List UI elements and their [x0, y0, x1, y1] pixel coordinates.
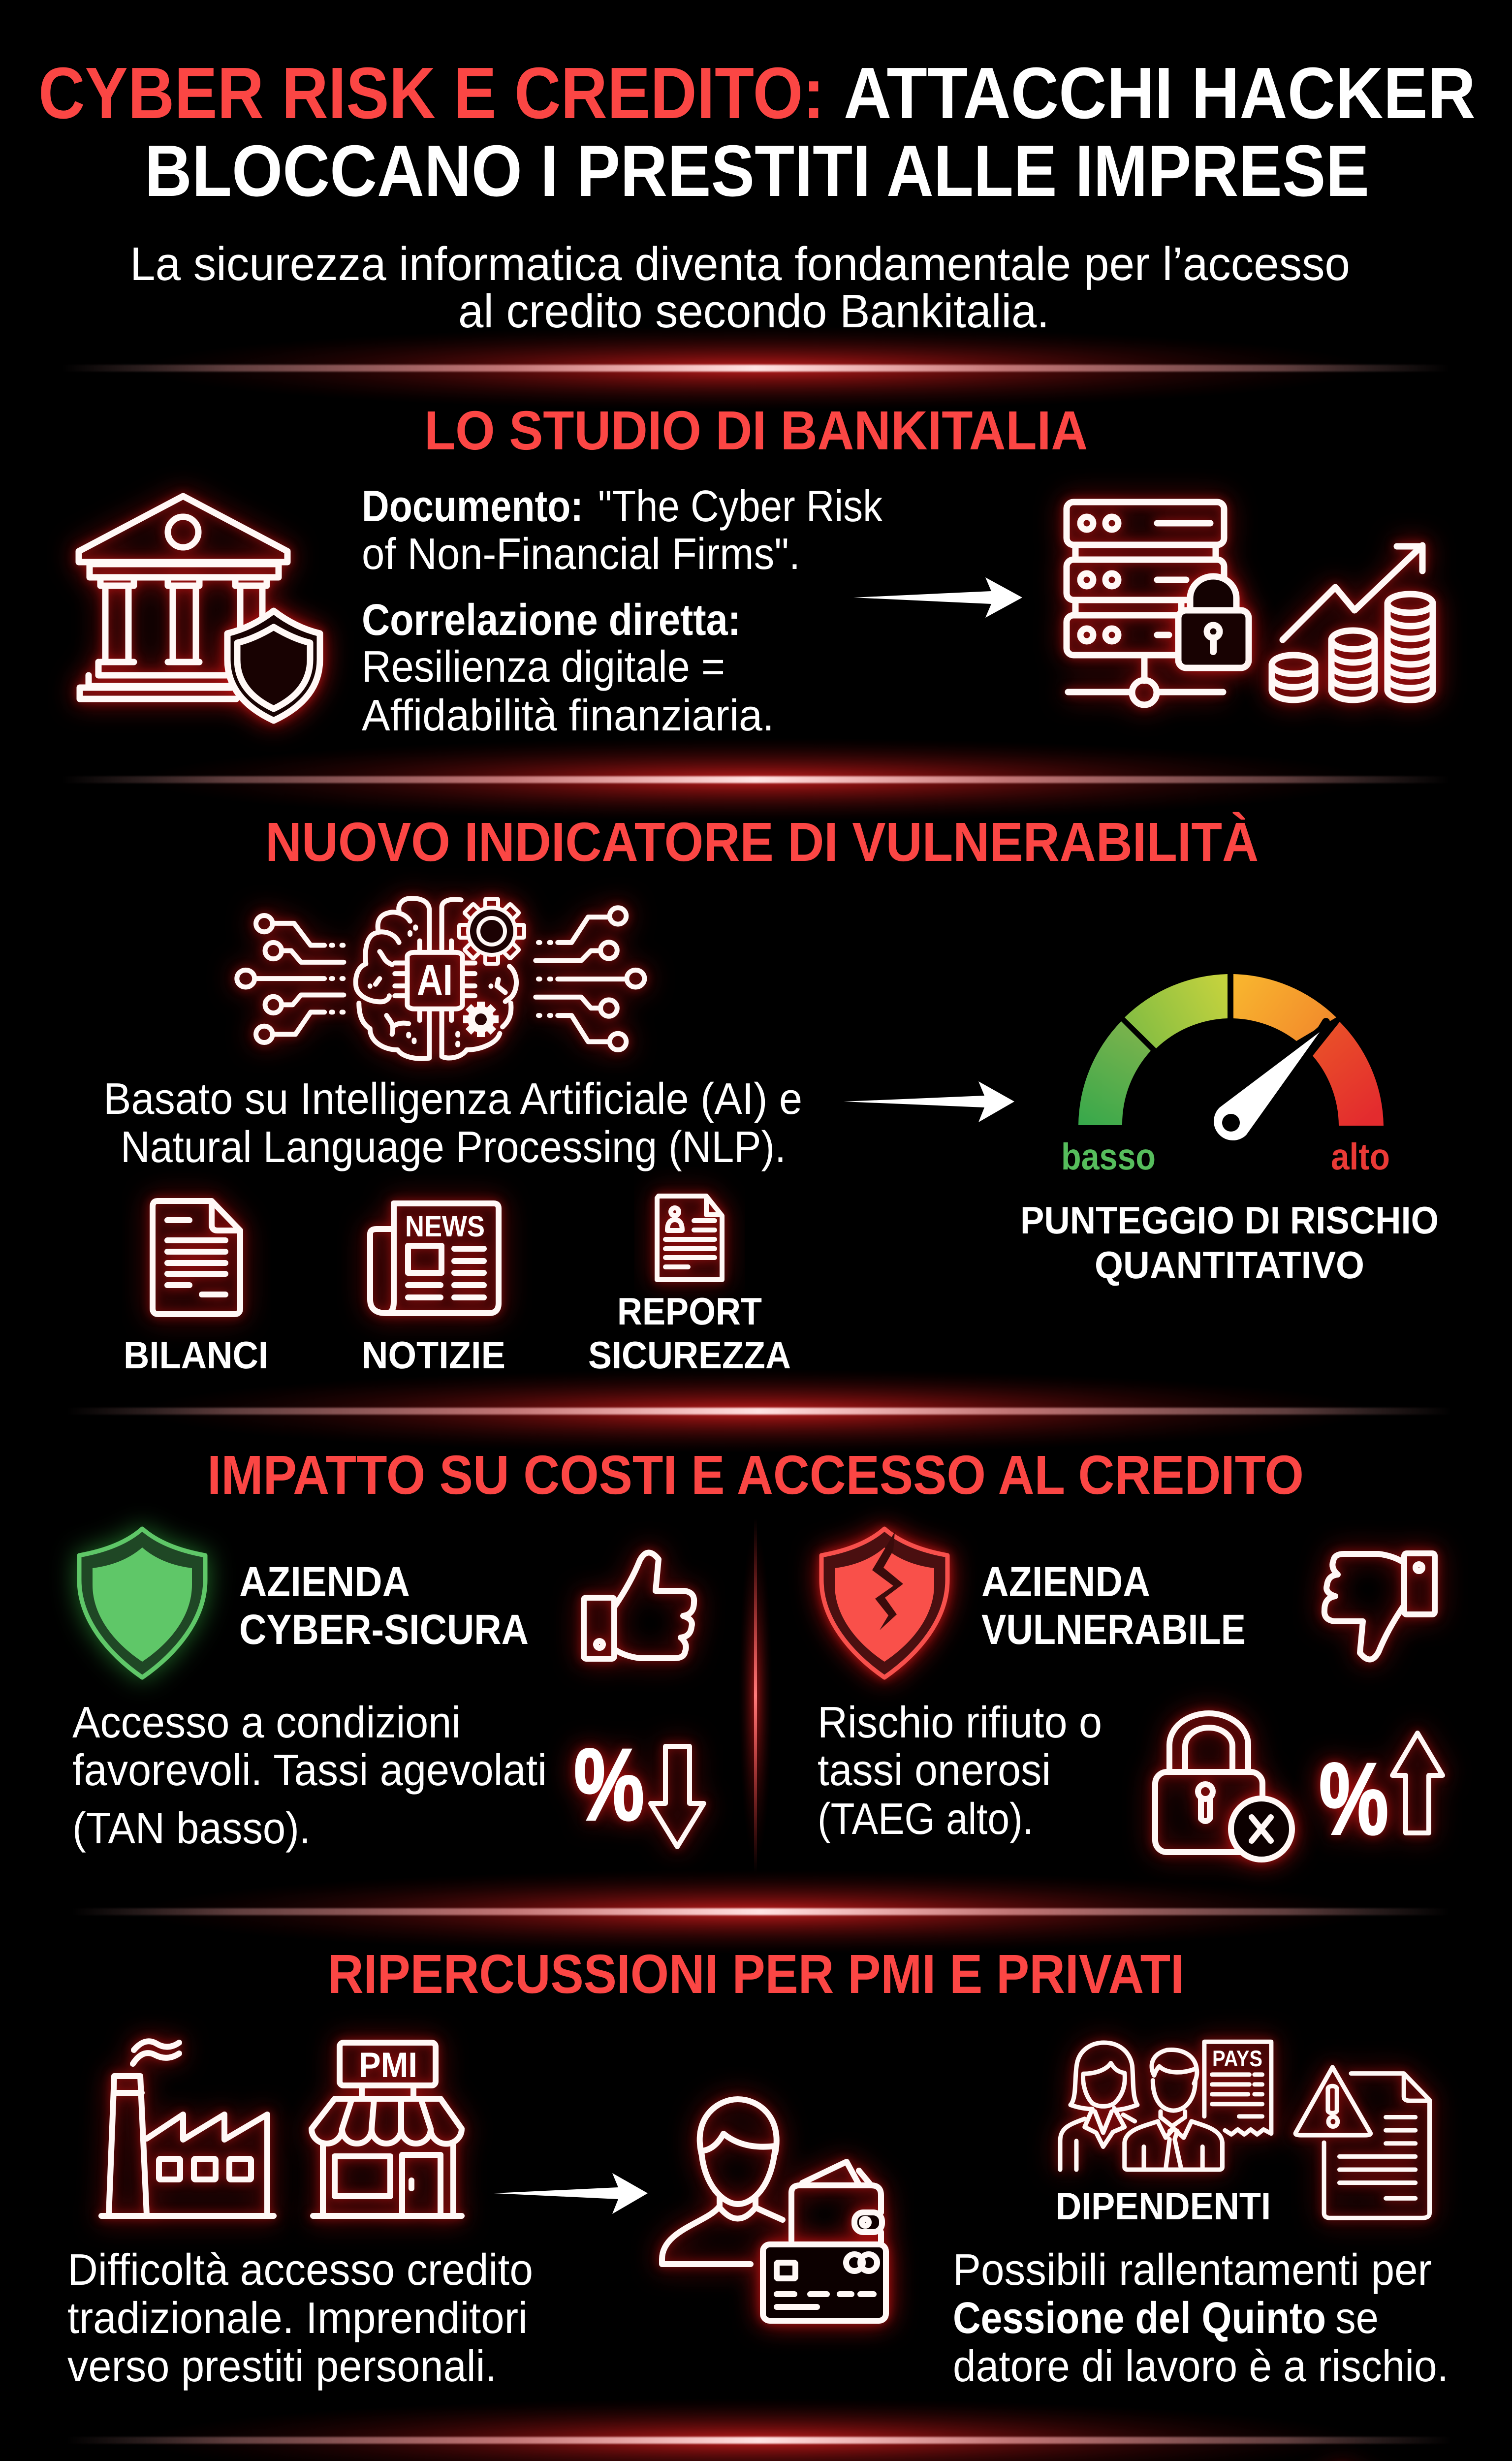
panel: nuovo indicatore di vulnerabilita [103, 811, 1439, 1377]
text: difficolta accesso credito: verso prestiti personali. [67, 2342, 497, 2391]
text: documento e correlazione: "The Cyber Risk [598, 482, 883, 531]
icon: percent up [1319, 1733, 1443, 1856]
icon: employees with payslip [1060, 2042, 1271, 2170]
title [38, 53, 1476, 212]
subtitle: al credito secondo Bankitalia. [458, 285, 1049, 338]
icon: coins and growth arrow [1272, 545, 1433, 700]
icon: AI brain with circuits [237, 898, 644, 1059]
icon: person with wallet and card [662, 2099, 886, 2321]
text: possibili rallentamenti: Possibili rallentamenti per [953, 2245, 1432, 2295]
text: rischio rifiuto: tassi onerosi [818, 1746, 1051, 1795]
text: accesso a condizioni: Accesso a condizioni [72, 1698, 461, 1747]
divider 2 [62, 738, 1449, 821]
icon: security report [657, 1196, 722, 1280]
label: dipendenti: DIPENDENTI [1056, 2184, 1271, 2228]
subtitle [130, 238, 1350, 338]
title: BLOCCANO I PRESTITI ALLE IMPRESE [145, 130, 1369, 212]
icon: percent up: % [1319, 1742, 1388, 1856]
gauge needle [1214, 1032, 1320, 1140]
icon: bank with shield [79, 496, 320, 721]
panel: impatto su costi [72, 1444, 1443, 1873]
text: accesso a condizioni: (TAN basso). [72, 1804, 311, 1853]
subtitle: La sicurezza informatica diventa fondamentale per l’accesso [130, 238, 1350, 290]
text: possibili rallentamenti [953, 2245, 1449, 2391]
text: basato su AI e NLP: Natural Language Processing (NLP). [121, 1123, 786, 1172]
icon: factory [101, 2041, 274, 2216]
text: possibili rallentamenti: se [1335, 2294, 1379, 2343]
text: possibili rallentamenti: Cessione del Quinto [953, 2294, 1326, 2343]
arrow [844, 1081, 1014, 1122]
label: azienda vulnerabile: VULNERABILE [981, 1606, 1246, 1653]
icon: bilanci document [153, 1201, 240, 1314]
icon: thumb up [584, 1552, 694, 1659]
label: report sicurezza: SICUREZZA [588, 1333, 791, 1377]
label: azienda vulnerabile: AZIENDA [981, 1558, 1150, 1606]
text: documento e correlazione: Correlazione diretta: [362, 596, 741, 645]
icon: newspaper [370, 1203, 499, 1313]
label: report sicurezza [588, 1290, 791, 1377]
caption: punteggio di rischio [1020, 1199, 1439, 1287]
vertical divider [739, 1518, 772, 1873]
caption: punteggio di rischio: PUNTEGGIO DI RISCHIO [1020, 1199, 1439, 1242]
icon: AI brain with circuits: AI [417, 955, 453, 1004]
text: basato su AI e NLP: Basato su Intelligenza Artificiale (AI) e [103, 1074, 802, 1124]
label: azienda cyber-sicura: CYBER-SICURA [239, 1606, 529, 1653]
title: CYBER RISK E CREDITO: [38, 53, 824, 134]
heading: nuovo indicatore: NUOVO INDICATORE DI VULNERABILITÀ [265, 811, 1259, 873]
divider 5 [66, 2398, 1452, 2461]
label: notizie: NOTIZIE [362, 1333, 505, 1377]
divider 3 [66, 1369, 1452, 1453]
text: difficolta accesso credito: Difficoltà accesso credito [67, 2245, 533, 2295]
icon: warning document [1295, 2067, 1429, 2218]
text: accesso a condizioni: favorevoli. Tassi agevolati [72, 1746, 547, 1795]
heading: lo studio di bankitalia: LO STUDIO DI BANKITALIA [424, 400, 1088, 461]
icon: padlock with x [1155, 1713, 1292, 1860]
text: documento e correlazione: of Non-Financial Firms". [362, 530, 800, 579]
text: difficolta accesso credito [67, 2245, 533, 2391]
text: documento e correlazione [362, 482, 883, 740]
icon: PMI shop: PMI [359, 2046, 417, 2085]
text: rischio rifiuto [818, 1698, 1102, 1844]
divider 1 [62, 326, 1449, 410]
text: accesso a condizioni [72, 1698, 547, 1853]
label: azienda cyber-sicura [239, 1558, 529, 1653]
text: documento e correlazione: Resilienza digitale = [362, 642, 725, 692]
icon: percent down [574, 1728, 704, 1847]
text: documento e correlazione: Affidabilità finanziaria. [362, 691, 774, 740]
heading: impatto: IMPATTO SU COSTI E ACCESSO AL CREDITO [207, 1444, 1304, 1506]
panel: ripercussioni [67, 1943, 1449, 2391]
arrow [853, 577, 1022, 618]
label: azienda vulnerabile [981, 1558, 1246, 1653]
text: difficolta accesso credito: tradizionale. Imprenditori [67, 2294, 528, 2343]
gauge label low: basso [1061, 1136, 1156, 1178]
text: basato su AI e NLP [103, 1074, 802, 1172]
icon: PMI shop [312, 2043, 462, 2216]
label: azienda cyber-sicura: AZIENDA [239, 1558, 410, 1606]
label: report sicurezza: REPORT [617, 1290, 762, 1333]
divider 4 [71, 1870, 1449, 1954]
caption: punteggio di rischio: QUANTITATIVO [1095, 1243, 1364, 1287]
icon: percent down: % [574, 1728, 644, 1841]
icon: green shield [79, 1529, 205, 1677]
chart: risk gauge [1061, 974, 1390, 1178]
icon: thumb down [1324, 1553, 1435, 1660]
text: possibili rallentamenti: datore di lavoro è a rischio. [953, 2342, 1449, 2391]
text: documento e correlazione: Documento: [362, 482, 583, 531]
icon: server with padlock [1067, 502, 1249, 705]
arrow [494, 2173, 648, 2214]
icon: newspaper: NEWS [405, 1210, 485, 1243]
icon: red broken shield [821, 1529, 947, 1677]
gauge label high: alto [1331, 1136, 1390, 1178]
panel: lo studio di bankitalia [79, 400, 1433, 740]
heading: ripercussioni: RIPERCUSSIONI PER PMI E PRIVATI [328, 1943, 1184, 2005]
text: rischio rifiuto: (TAEG alto). [818, 1795, 1034, 1844]
icon: employees with payslip: PAYS [1212, 2046, 1262, 2071]
label: bilanci: BILANCI [124, 1333, 268, 1377]
text: rischio rifiuto: Rischio rifiuto o [818, 1698, 1102, 1747]
